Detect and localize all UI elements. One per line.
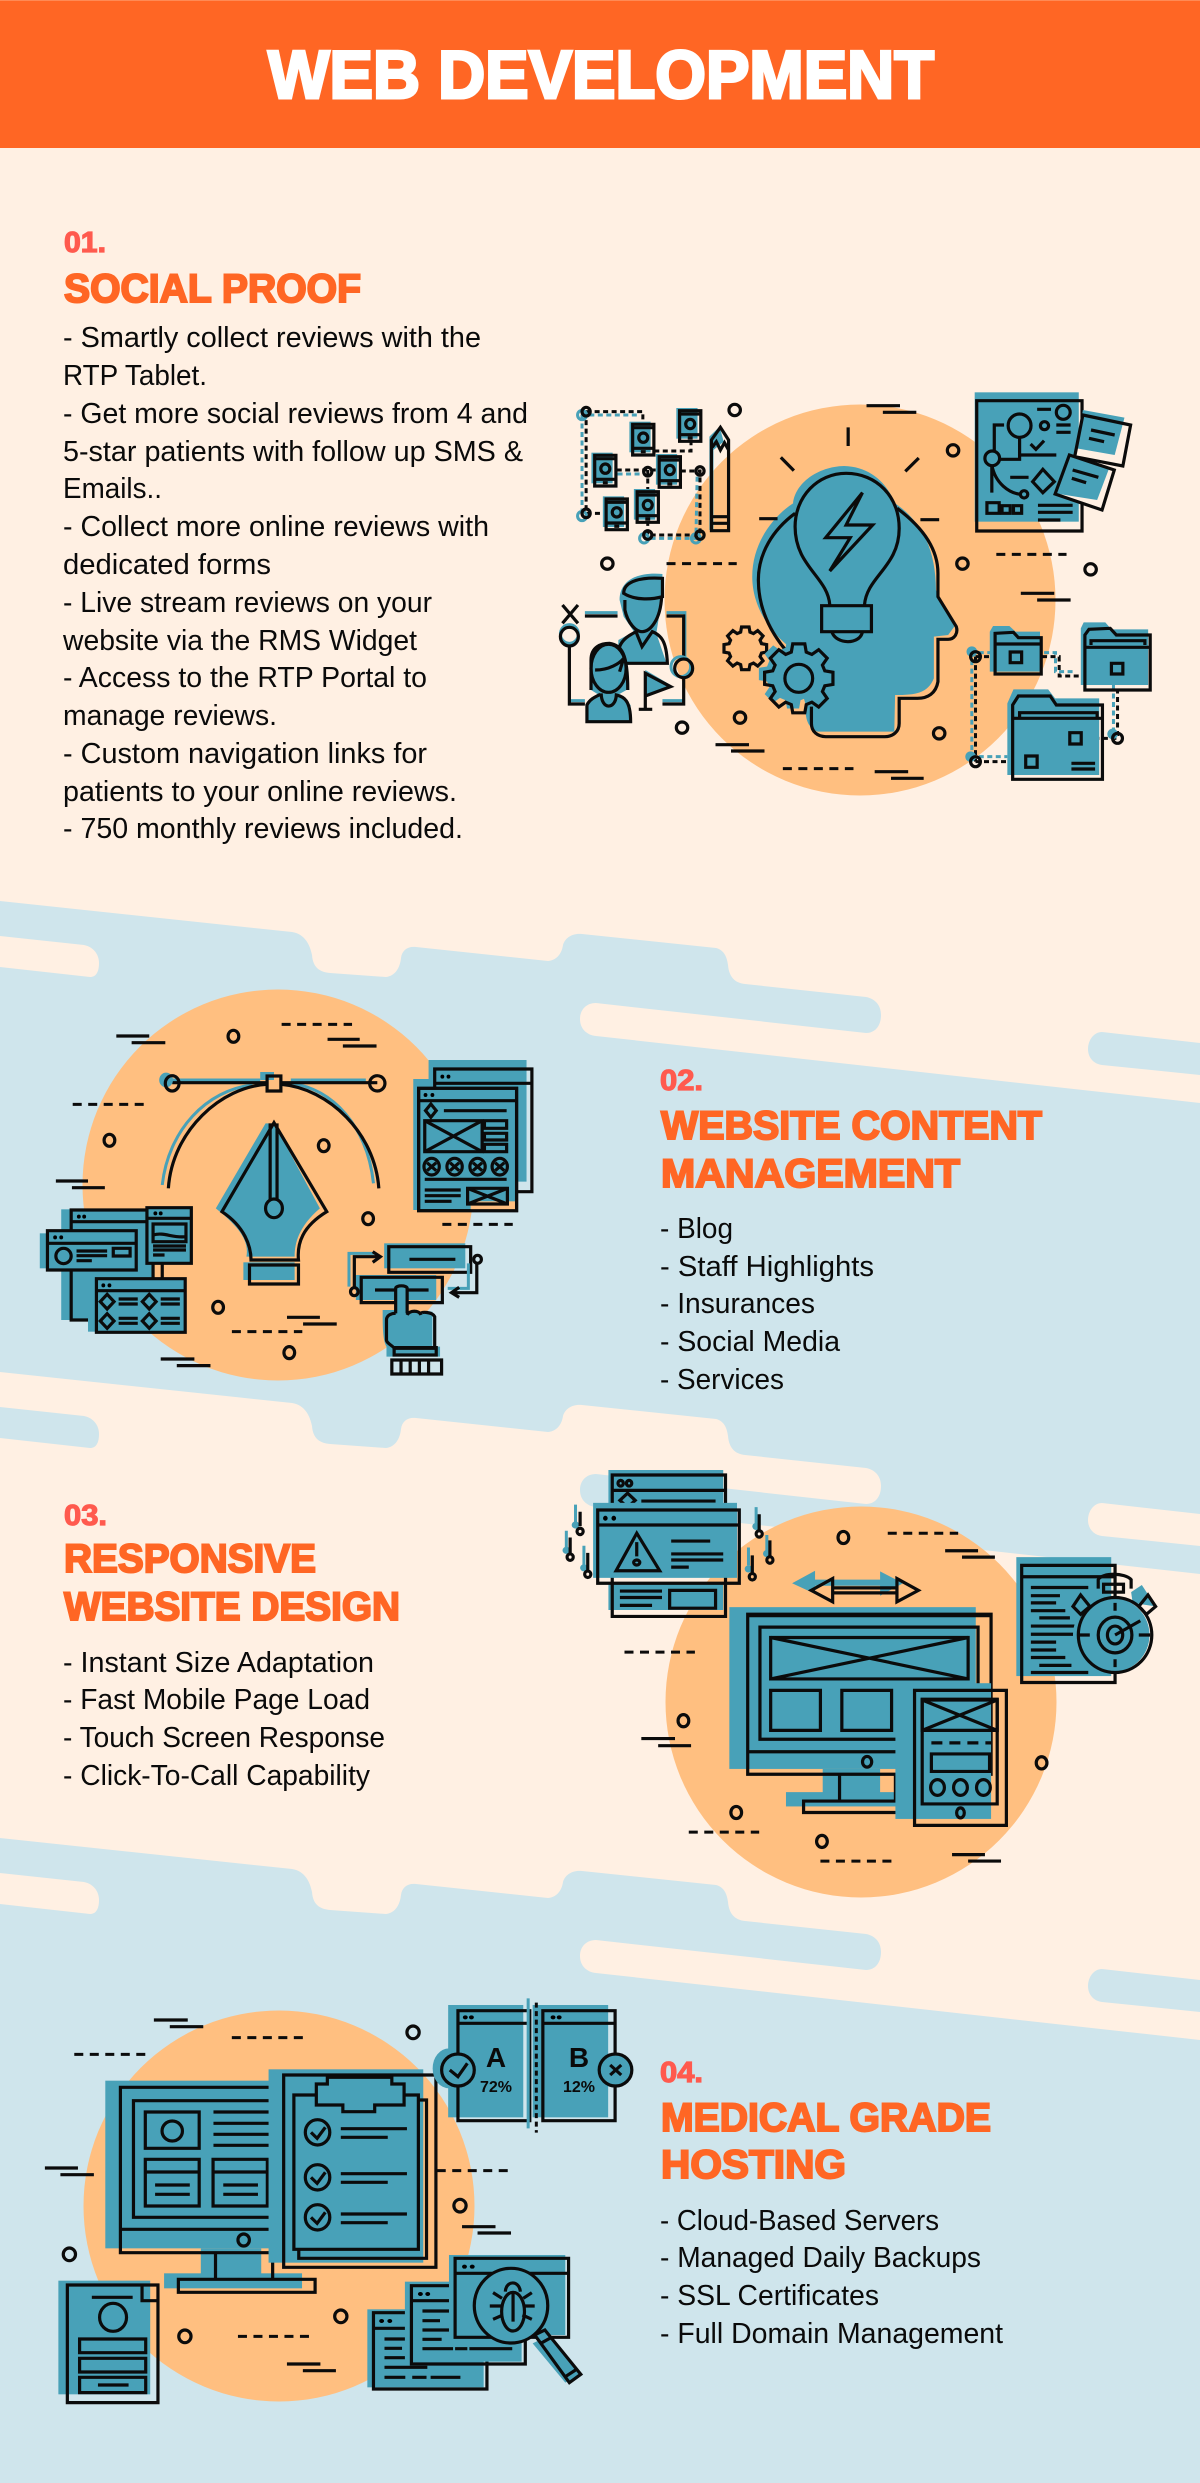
bullet text: - Managed Daily Backups	[660, 2242, 981, 2274]
illustration artwork	[563, 1470, 1156, 1861]
section heading: MANAGEMENT	[661, 1152, 960, 1196]
bullet text: - Smartly collect reviews with the	[63, 322, 481, 354]
bullet text: - Full Domain Management	[660, 2318, 1003, 2350]
section heading: SOCIAL PROOF	[64, 267, 361, 311]
icon: phone wireframe	[895, 1683, 1006, 1825]
section number: 03.	[64, 1500, 107, 1532]
bullet text: - Access to the RTP Portal to	[63, 662, 427, 694]
bullet text	[63, 1647, 385, 1792]
bullet text: website via the RMS Widget	[62, 625, 417, 657]
bullet text	[62, 322, 528, 845]
icon: head with lightbulb	[752, 427, 957, 737]
panel: 02 illustration	[40, 990, 532, 1380]
icon: profile document	[58, 2281, 158, 2403]
orange circle	[84, 2010, 474, 2402]
bullet text: - Blog	[660, 1213, 733, 1245]
section number: 01.	[64, 227, 106, 259]
decorative dots and dashes	[624, 1531, 1047, 1861]
section heading: WEBSITE CONTENT	[661, 1104, 1042, 1148]
icon: alert windows	[593, 1470, 739, 1616]
icon: monitor wireframe	[729, 1607, 991, 1812]
bullet text: 5-star patients with follow up SMS &	[63, 436, 523, 468]
icon: pencil	[709, 427, 729, 531]
orange circle	[664, 404, 1056, 796]
panel: 01 social proof text	[62, 227, 528, 845]
section number: 04.	[660, 2057, 703, 2089]
bullet text: - Custom navigation links for	[63, 738, 428, 770]
illustration artwork	[45, 1998, 632, 2403]
icon: desktop monitor	[105, 2081, 315, 2292]
icon: A/B test windows	[433, 1998, 632, 2133]
bullet text: manage reviews.	[63, 700, 277, 732]
bullet text	[660, 2205, 1003, 2350]
icon: click flow with hand	[349, 1243, 481, 1374]
bullet text: - 750 monthly reviews included.	[63, 813, 463, 845]
decorative dots and dashes	[56, 1024, 513, 1366]
orange circle	[82, 990, 474, 1380]
illustration artwork	[40, 1024, 532, 1374]
section heading: HOSTING	[661, 2143, 846, 2187]
illustration artwork	[560, 392, 1150, 779]
bullet text: dedicated forms	[63, 549, 271, 581]
bullet text: - Insurances	[660, 1288, 815, 1320]
section heading	[64, 1537, 400, 1629]
bullet text: - Live stream reviews on your	[63, 587, 432, 619]
bullet text: - Click-To-Call Capability	[63, 1760, 371, 1792]
icon: checklist clipboard	[269, 2069, 436, 2267]
bullet text: - Cloud-Based Servers	[660, 2205, 939, 2237]
decorative dots and dashes	[602, 404, 1096, 778]
bullet text: - Collect more online reviews with	[63, 511, 489, 543]
bullet text: - Fast Mobile Page Load	[63, 1684, 370, 1716]
icon: pen tool nib	[159, 1072, 385, 1284]
A/B test labels: B	[569, 2042, 589, 2073]
icon: left browser windows	[40, 1208, 191, 1332]
bullet text: - Instant Size Adaptation	[63, 1647, 374, 1679]
bullet text: - Services	[660, 1364, 784, 1396]
title: WEB DEVELOPMENT	[268, 37, 934, 113]
icon: flowchart document	[975, 392, 1131, 531]
icon: two people with flag	[560, 574, 693, 722]
bullet text: patients to your online reviews.	[63, 776, 457, 808]
icon: gears	[724, 627, 833, 713]
A/B test labels: 72%	[480, 2079, 512, 2096]
bullet text: Emails..	[63, 473, 162, 505]
decorative dots and dashes	[45, 2020, 511, 2371]
A/B test labels: 12%	[563, 2079, 595, 2096]
icon: small alert pins	[563, 1505, 773, 1580]
bullet text: - Get more social reviews from 4 and	[63, 398, 528, 430]
icon: phone network	[578, 407, 704, 543]
panel: 04 illustration	[45, 1998, 632, 2403]
panel: 02 website content management text	[660, 1065, 1042, 1396]
panel: 04 medical grade hosting text	[660, 2057, 1003, 2350]
bullet text: - SSL Certificates	[660, 2280, 879, 2312]
icon: wireframe windows	[413, 1060, 532, 1211]
section heading: WEBSITE DESIGN	[64, 1585, 400, 1629]
panel: 03 responsive website design text	[63, 1500, 400, 1792]
bullet text: - Social Media	[660, 1326, 840, 1358]
section heading	[661, 2096, 991, 2187]
orange circle	[666, 1506, 1056, 1898]
A/B test labels	[480, 2042, 595, 2096]
icon: code window with stopwatch	[1016, 1557, 1156, 1682]
bullet text: RTP Tablet.	[63, 360, 207, 392]
bullet text: - Touch Screen Response	[63, 1722, 385, 1754]
bullet text: - Staff Highlights	[660, 1251, 874, 1283]
section number: 02.	[660, 1065, 703, 1097]
section heading	[661, 1104, 1042, 1196]
panel: 03 illustration	[563, 1470, 1156, 1898]
header banner	[0, 0, 1200, 148]
A/B test labels: A	[486, 2042, 506, 2073]
icon: bug search windows	[367, 2255, 581, 2389]
bullet text	[660, 1213, 874, 1396]
wave band: cream section three	[0, 1372, 1200, 2071]
panel: 01 illustration	[560, 392, 1150, 796]
wave band: blue section four	[0, 1838, 1200, 2483]
icon: connected folders	[965, 622, 1150, 779]
section heading: RESPONSIVE	[64, 1537, 316, 1581]
wave band: blue section two	[0, 901, 1200, 1600]
section heading: MEDICAL GRADE	[661, 2096, 991, 2140]
icon: resize arrow	[792, 1571, 918, 1602]
